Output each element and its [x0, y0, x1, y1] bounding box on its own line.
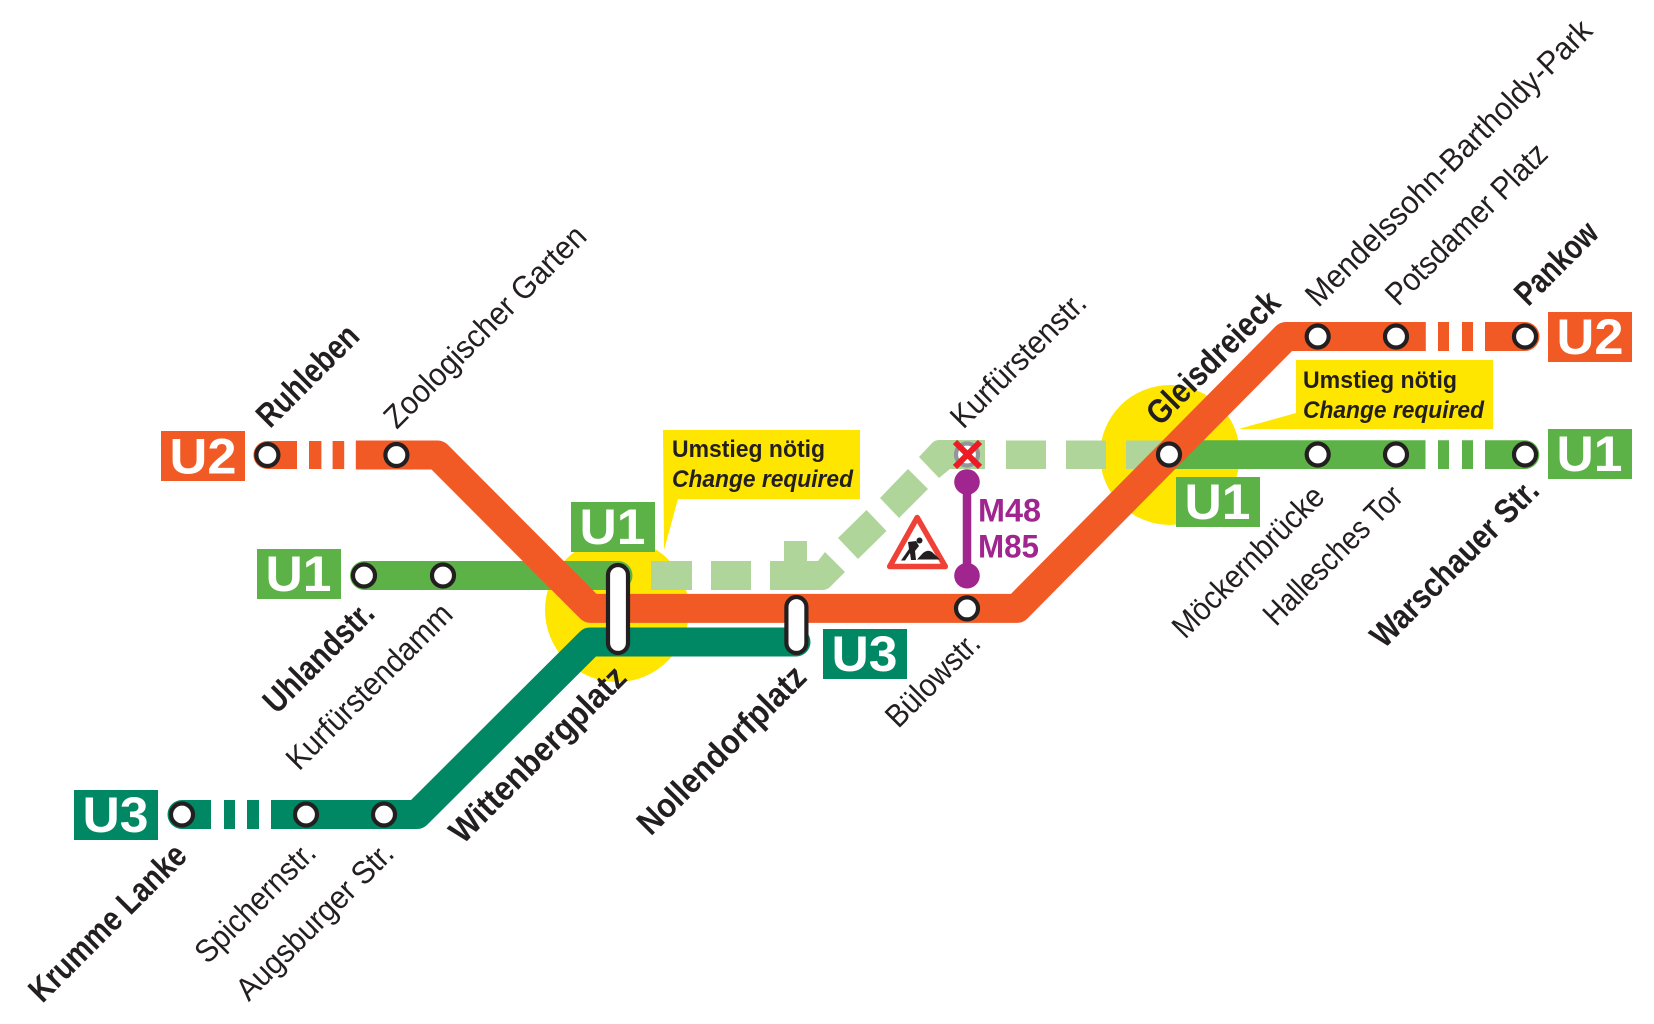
station label: Kurfürstenstr.: Kurfürstenstr. — [943, 284, 1093, 435]
line badge: U3 at Nollendorfplatz: U3 — [832, 626, 898, 682]
station label: Mendelssohn-Bartholdy-Park: Mendelssohn-Bartholdy-Park — [1298, 11, 1600, 313]
bus replacement link M48 M85 — [954, 469, 1041, 588]
station label: Krumme Lanke: Krumme Lanke — [21, 836, 194, 1010]
station label: Augsburger Str.: Augsburger Str. — [228, 835, 401, 1007]
interchange marker: Wittenbergplatz — [608, 565, 628, 653]
station label: Zoologischer Garten: Zoologischer Garten — [376, 218, 593, 435]
line U2 — [253, 322, 1540, 608]
interchange marker: Nollendorfplatz — [786, 597, 806, 653]
station label: Pankow: Pankow — [1507, 214, 1606, 313]
station label: Möckernbrücke: Möckernbrücke — [1164, 478, 1331, 645]
line badge: U1 at Wittenbergplatz: U1 — [580, 499, 646, 555]
interchange highlight: Wittenbergplatz — [545, 538, 689, 682]
line U3 — [168, 628, 810, 829]
line badge: U2 east: U2 — [1556, 309, 1624, 365]
callout: change required, east: Umstieg nötig — [1303, 367, 1457, 394]
station label: Ruhleben: Ruhleben — [249, 317, 367, 435]
line badge: U1 east: U1 — [1556, 426, 1622, 482]
callout: change required, west: Umstieg nötig — [672, 436, 825, 463]
station label: Gleisdreieck: Gleisdreieck — [1139, 283, 1288, 433]
icon: construction warning sign — [890, 518, 945, 566]
station label: Nollendorfplatz: Nollendorfplatz — [629, 658, 814, 842]
station label: Uhlandstr.: Uhlandstr. — [255, 594, 382, 721]
callout: change required, east: Change required — [1303, 397, 1485, 424]
line badge: U2 west: U2 — [170, 428, 236, 484]
station label: Bülowstr.: Bülowstr. — [878, 625, 987, 734]
closed U1 section (pale dashed line) — [651, 440, 1176, 590]
line badge: U1 west: U1 — [266, 546, 332, 602]
callout: change required, west — [663, 430, 860, 550]
bus replacement link M48 M85: M85 — [978, 528, 1039, 564]
line badge: U1 at Gleisdreieck: U1 — [1184, 474, 1250, 530]
station label: Wittenbergplatz: Wittenbergplatz — [442, 658, 634, 851]
station label: Warschauer Str.: Warschauer Str. — [1363, 471, 1547, 655]
callout: change required, west: Change required — [672, 466, 854, 493]
line U1 east section — [1155, 440, 1539, 469]
station label: Spichernstr.: Spichernstr. — [187, 834, 323, 970]
station markers — [171, 326, 1536, 826]
bus replacement link M48 M85: M48 — [978, 493, 1041, 529]
callout: change required, east — [1238, 360, 1493, 429]
station label: Hallesches Tor: Hallesches Tor — [1255, 478, 1410, 632]
line badge: U3 west: U3 — [82, 787, 148, 843]
closed station: Kurfürstenstr. with red cross — [955, 442, 980, 467]
station label: Potsdamer Platz: Potsdamer Platz — [1378, 135, 1555, 312]
interchange highlight: Gleisdreieck — [1100, 385, 1240, 525]
station label: Kurfürstendamm: Kurfürstendamm — [278, 596, 460, 777]
line U1 west section — [364, 561, 618, 590]
